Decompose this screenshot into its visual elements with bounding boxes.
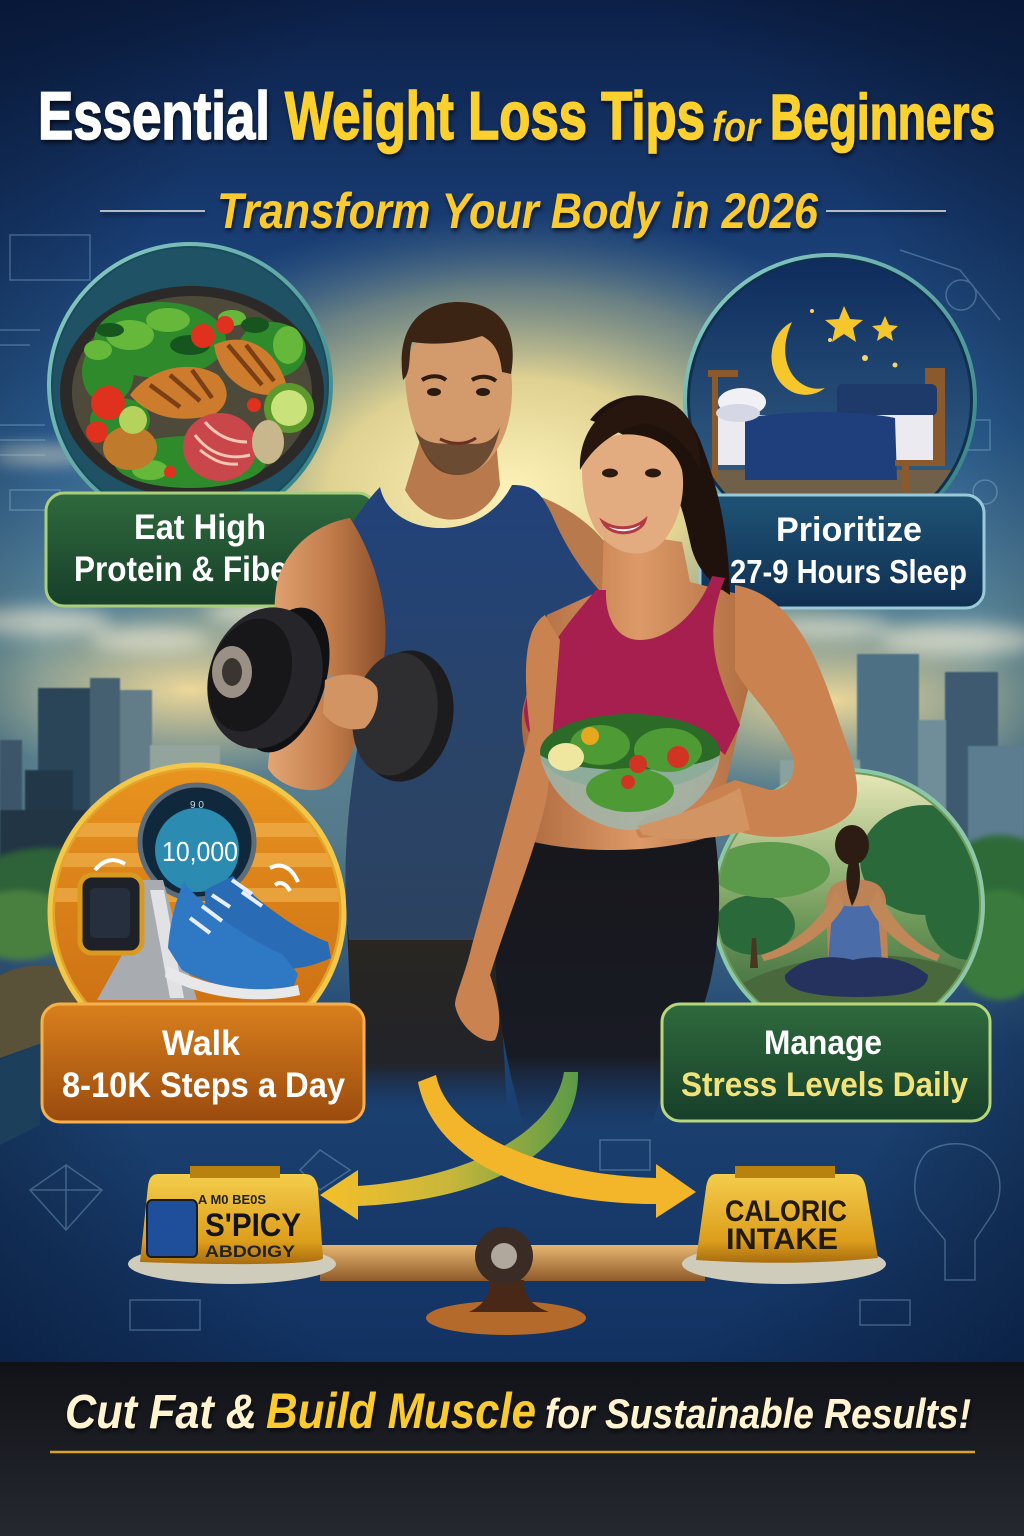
trees right — [945, 835, 1024, 1000]
woman face — [602, 468, 661, 533]
left pan — [128, 1166, 336, 1284]
label: walk steps: Walk — [162, 1024, 241, 1063]
man tank top — [334, 485, 599, 940]
man neck and head — [402, 302, 513, 520]
label: walk steps: 8-10K Steps a Day — [62, 1066, 345, 1105]
man legs — [347, 925, 507, 1110]
label: manage stress: Manage — [764, 1024, 882, 1062]
panel: steps shoes and counter: 9 0 — [190, 800, 204, 811]
label: prioritize sleep: 27-9 Hours Sleep — [730, 553, 967, 590]
arrow to exercise bowl — [320, 1072, 578, 1220]
footer slogan: for Sustainable Results! — [545, 1390, 971, 1437]
woman figure — [455, 395, 857, 1130]
label: prioritize sleep — [700, 495, 984, 608]
city skyline right — [780, 654, 1024, 856]
title: for — [712, 103, 762, 150]
title — [38, 78, 995, 154]
footer slogan: Build Muscle — [266, 1383, 536, 1439]
right pan: CALORIC — [725, 1195, 847, 1228]
panel: protein and fiber food plate — [47, 242, 333, 492]
city skyline left — [0, 678, 220, 870]
right pan — [682, 1166, 886, 1284]
beam — [320, 1245, 705, 1281]
label: eat high protein and fiber: Protein & Fiber — [74, 550, 300, 589]
panel: steps shoes and counter — [48, 762, 346, 1002]
footer slogan: Cut Fat & — [65, 1386, 257, 1439]
label: prioritize sleep: Prioritize — [776, 511, 922, 549]
left pan: A M0 BE0S — [198, 1192, 266, 1207]
balance scale — [128, 1166, 886, 1335]
scale arrows — [320, 1072, 696, 1220]
panel: stress meditation — [716, 768, 985, 1002]
footer slogan — [65, 1383, 971, 1439]
title: Essential — [38, 78, 270, 154]
left pan: S'PICY — [205, 1207, 301, 1243]
subtitle: Transform Your Body in 2026 — [217, 183, 819, 239]
woman right arm — [636, 585, 857, 838]
man figure — [189, 302, 625, 1110]
woman leggings — [495, 835, 719, 1130]
label: manage stress — [662, 1004, 990, 1121]
label: eat high protein and fiber — [46, 493, 376, 606]
base — [426, 1301, 586, 1335]
man far shoulder — [510, 488, 625, 620]
panel: sleep bedroom — [683, 253, 977, 494]
icon: dumbbell — [189, 592, 464, 789]
footer band — [0, 1362, 1024, 1536]
woman left arm — [455, 615, 560, 1041]
left pan: ABDOIGY — [205, 1242, 296, 1261]
label: walk steps — [42, 1004, 364, 1122]
trees left — [0, 848, 135, 1145]
step count: 10,000 — [162, 836, 238, 867]
right pan: INTAKE — [726, 1223, 838, 1256]
woman hand under bowl — [638, 788, 750, 839]
salad bowl — [540, 714, 720, 830]
woman ponytail and hair — [590, 395, 730, 595]
woman head — [582, 434, 683, 554]
pivot — [469, 1227, 549, 1312]
label: manage stress: Stress Levels Daily — [681, 1066, 968, 1104]
woman hair top — [580, 397, 700, 470]
woman torso — [508, 530, 770, 850]
title: Weight Loss Tips — [285, 78, 705, 154]
label: eat high protein and fiber: Eat High — [134, 508, 266, 547]
woman sports bra — [524, 576, 740, 755]
man left arm — [268, 518, 386, 790]
arrow to caloric intake — [418, 1075, 696, 1218]
